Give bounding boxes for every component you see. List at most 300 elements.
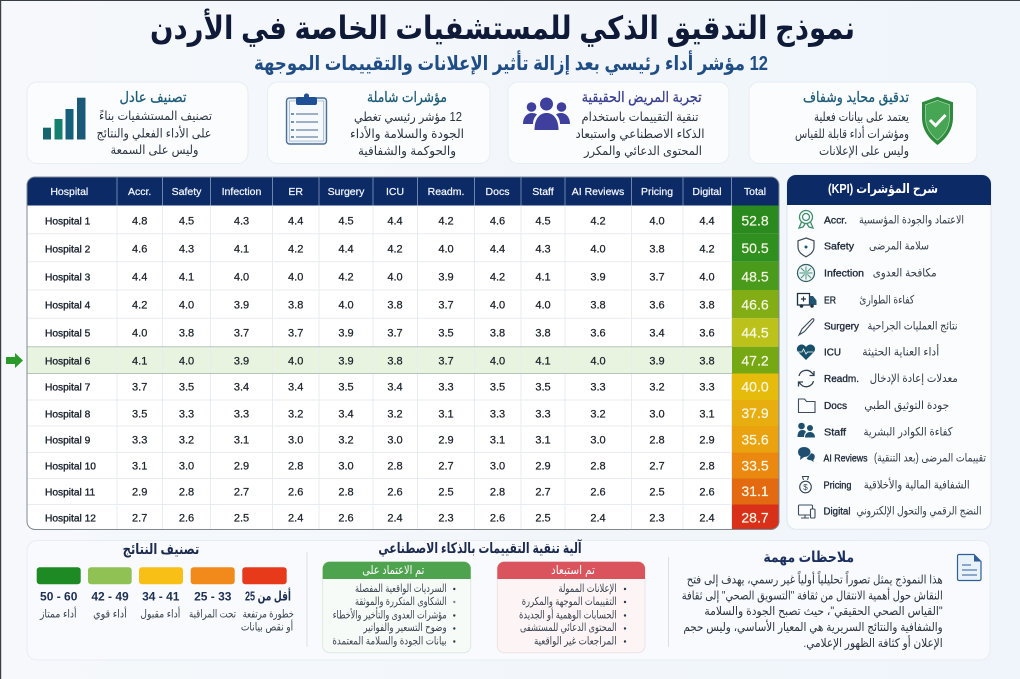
KPI: digital	[798, 505, 982, 518]
row: hospital 1: 4.3	[234, 216, 249, 228]
row: hospital 1: 4.2	[590, 216, 606, 228]
row: hospital 3: 4.1	[535, 272, 551, 284]
notes paragraph: والشفافية والنتائج السريرية هي المعيار الأساسي، وليس حجم	[683, 619, 943, 635]
table header: Digital	[692, 186, 722, 198]
class: acceptable: 34 - 41	[142, 590, 180, 604]
row: hospital 10: 2.7	[438, 461, 454, 473]
row: hospital 6: 3.7	[438, 356, 454, 368]
KPI: infection: مكافحة العدوى	[873, 268, 937, 280]
card text: تصنيف المستشفيات بناءً	[99, 109, 212, 123]
box: relied upon: وضوح التسعير والفواتير	[363, 622, 447, 634]
row: hospital 9: 3.0	[288, 435, 303, 447]
KPI: documentation	[798, 399, 949, 413]
row: hospital 7: 3.4	[288, 382, 303, 394]
row: hospital 9: 3.0	[387, 435, 403, 447]
box: excluded: الحسابات الوهمية أو الجديدة	[519, 608, 617, 622]
row: hospital 10: 3.0	[179, 461, 194, 473]
row: hospital 2: 4.4	[338, 243, 354, 255]
row: hospital 4: 3.6	[649, 300, 665, 312]
KPI: emergency: ER	[824, 294, 836, 306]
table header: Readm.	[428, 186, 464, 198]
KPI: safety: Safety	[824, 240, 855, 252]
row: hospital 3: Hospital 3	[45, 272, 91, 284]
row: hospital 8: 3.5	[132, 408, 147, 420]
KPI: infection: Infection	[824, 268, 864, 280]
class: excellent: أداء ممتاز	[39, 606, 77, 620]
row: hospital 2: 4.0	[438, 243, 454, 255]
KPI: pricing	[800, 476, 970, 493]
table header: Docs	[486, 186, 509, 198]
row: hospital 1	[45, 212, 769, 228]
icon: people	[523, 98, 570, 130]
KPI: documentation: جودة التوثيق الطبي	[864, 400, 949, 413]
row: hospital 12: 2.4	[288, 513, 303, 525]
icon: document	[958, 554, 981, 580]
row: hospital 4: 4.0	[535, 300, 551, 312]
row: hospital 9: 3.2	[179, 435, 194, 447]
notes paragraph: "القياس الصحي الحقيقي"، حيث تصبح الجودة والسلامة	[704, 604, 943, 619]
row: hospital 9: 35.6	[741, 432, 769, 448]
table header: Pricing	[641, 186, 673, 198]
row: hospital 7: 3.3	[590, 382, 606, 394]
row: hospital 7: 3.4	[234, 382, 249, 394]
row: hospital 2: 4.0	[590, 243, 606, 255]
panel: real patient experience card	[508, 82, 729, 164]
KPI: surgery	[799, 319, 958, 335]
row: hospital 3: 3.9	[438, 272, 454, 284]
notes paragraph: الإعلان أو كثافة الظهور الإعلامي.	[803, 635, 943, 651]
row: hospital 8: 37.9	[741, 405, 769, 421]
row: hospital 7: 3.5	[535, 382, 551, 394]
row: hospital 8	[45, 405, 769, 421]
row: hospital 2: Hospital 2	[45, 244, 91, 255]
row: hospital 4: 3.8	[387, 300, 403, 312]
row: hospital 5: 3.7	[387, 328, 403, 340]
class: excellent	[37, 567, 81, 620]
row: hospital 6	[45, 352, 769, 368]
KPI: AI reviews	[798, 447, 986, 466]
row: hospital 4	[45, 296, 769, 312]
row: hospital 12: 28.7	[741, 510, 769, 526]
row: hospital 12: 2.6	[490, 513, 505, 525]
box: relied upon: مؤشرات العدوى والتأخير والأخطاء	[333, 606, 447, 622]
panel: results classification	[37, 542, 294, 634]
class: strong	[88, 567, 132, 620]
row: hospital 7: 3.5	[490, 382, 505, 394]
row: hospital 6: 4.0	[490, 356, 505, 368]
row: hospital 9: 2.8	[649, 435, 665, 447]
row: hospital 11: 2.7	[234, 486, 249, 498]
panel: neutral transparent audit card	[749, 82, 977, 164]
row: hospital 3: 4.2	[490, 272, 505, 284]
row: hospital 3: 4.2	[338, 272, 354, 284]
class: strong: أداء قوي	[93, 606, 127, 620]
row: hospital 4: 4.0	[338, 300, 354, 312]
row: hospital 11: 2.8	[490, 486, 505, 498]
row: hospital 3	[45, 268, 769, 284]
row: hospital 9: 3.0	[590, 435, 606, 447]
panel: bottom strip background	[27, 540, 990, 660]
KPI: digital: Digital	[824, 506, 850, 518]
notes heading: ملاحظات مهمة	[763, 549, 854, 566]
card text: وليس على الإعلانات	[819, 144, 909, 159]
table header: ER	[288, 186, 303, 198]
row: hospital 10: 2.9	[234, 461, 249, 473]
row: hospital 6: 4.1	[535, 356, 551, 368]
row: hospital 11: 2.6	[699, 486, 715, 498]
row: hospital 10: Hospital 10	[45, 462, 96, 473]
row: hospital 2: 4.3	[179, 243, 194, 255]
class: strong: 42 - 49	[91, 590, 129, 604]
table header: Total	[744, 186, 766, 198]
row: hospital 1: 4.4	[699, 216, 715, 228]
icon: shield check	[922, 97, 953, 145]
row: hospital 10: 3.1	[132, 461, 147, 473]
table header: Surgery	[328, 186, 365, 198]
KPI: accreditation	[799, 210, 964, 228]
row: hospital 3: 4.1	[179, 272, 194, 284]
row: hospital 4: 3.7	[438, 300, 454, 312]
KPI: readmission: معدلات إعادة الإدخال	[870, 373, 958, 385]
row: hospital 10: 3.0	[338, 461, 354, 473]
table header: Safety	[172, 186, 202, 198]
row: hospital 6: 4.0	[288, 356, 303, 368]
row: hospital 12	[45, 510, 769, 526]
row: hospital 5: 3.8	[490, 328, 505, 340]
icon: clipboard	[286, 93, 326, 144]
KPI: readmission	[798, 370, 958, 387]
panel: important notes	[682, 549, 981, 651]
row: hospital 2: 4.2	[288, 243, 303, 255]
row: hospital 4: 3.8	[590, 300, 606, 312]
row: hospital 6: 3.9	[234, 356, 249, 368]
row: hospital 12: 2.7	[132, 513, 147, 525]
KPI: ICU: ICU	[824, 346, 841, 358]
row: hospital 9: 3.1	[490, 435, 505, 447]
row: hospital 5: 3.9	[338, 328, 354, 340]
KPI: staff: كفاءة الكوادر البشرية	[864, 426, 953, 440]
row: hospital 10: 33.5	[741, 458, 769, 474]
class: high risk: خطورة مرتفعة	[243, 608, 294, 620]
box: excluded: المحتوى الدعائي للمستشفى	[520, 622, 617, 634]
row: hospital 10: 3.0	[490, 461, 505, 473]
row: hospital 3: 4.0	[699, 272, 715, 284]
KPI: ICU: أداء العناية الحثيثة	[862, 344, 939, 358]
row: hospital 8: 3.2	[590, 408, 606, 420]
row: hospital 8: Hospital 8	[45, 409, 91, 420]
row: hospital 5: 3.7	[288, 328, 303, 340]
row: hospital 3: 48.5	[741, 268, 769, 284]
panel: fair ranking card	[27, 82, 248, 164]
total score colour column	[732, 206, 779, 530]
row: hospital 2: 4.2	[387, 243, 403, 255]
row: hospital 1: 4.8	[132, 216, 147, 228]
card text	[576, 110, 704, 159]
row: hospital 8: 3.3	[490, 408, 505, 420]
row: hospital 5: 3.4	[649, 328, 665, 340]
icon: bar chart	[43, 98, 86, 140]
box: excluded: المراجعات غير الواقعية	[534, 636, 617, 648]
card text	[96, 109, 212, 158]
KPI: staff	[798, 423, 953, 440]
row: hospital 10: 2.8	[288, 461, 303, 473]
row: hospital 9: 2.9	[438, 435, 454, 447]
row: hospital 3: 4.0	[288, 272, 303, 284]
row: hospital 11	[45, 483, 769, 499]
row: hospital 8: 3.2	[387, 408, 403, 420]
table header: AI Reviews	[572, 186, 624, 198]
row: hospital 9: 3.1	[234, 435, 249, 447]
row: hospital 7: 3.3	[438, 382, 454, 394]
row: hospital 11: Hospital 11	[45, 487, 96, 498]
row: hospital 9: 3.1	[535, 435, 551, 447]
box: relied upon: بيانات الجودة والسلامة المعتمدة	[332, 636, 447, 648]
row: hospital 12: 2.5	[234, 513, 249, 525]
row: hospital 1: 4.0	[649, 216, 665, 228]
row: hospital 1: 52.8	[741, 212, 769, 228]
row: hospital 9: 3.3	[132, 435, 147, 447]
row: hospital 3: 3.7	[649, 272, 665, 284]
box: excluded: التقييمات الموجهة والمكررة	[522, 596, 617, 608]
card text: والحوكمة والشفافية	[358, 144, 456, 159]
row: hospital 6: Hospital 6	[45, 356, 91, 368]
row: hospital 1: 4.2	[438, 216, 454, 228]
row: hospital 8: 3.3	[179, 408, 194, 420]
card text: المحتوى الدعائي والمكرر	[583, 144, 702, 159]
row: hospital 1: 4.6	[490, 216, 505, 228]
row: hospital 6: 3.9	[649, 356, 665, 368]
row: hospital 12: 2.6	[179, 513, 194, 525]
row: hospital 8: 3.4	[338, 408, 354, 420]
row: hospital 4: 4.0	[179, 300, 194, 312]
KPI: AI reviews: تقييمات المرضى (بعد التنقية)	[874, 452, 986, 466]
card text: 12 مؤشر رئيسي تغطي	[354, 110, 462, 125]
row: hospital 12: 2.3	[649, 513, 665, 525]
card text: تنقية التقييمات باستخدام	[582, 110, 699, 124]
row: hospital 2: 3.8	[649, 243, 665, 255]
row: hospital 4: 4.0	[490, 300, 505, 312]
title: نموذج التدقيق الذكي للمستشفيات الخاصة في الأردن	[150, 8, 855, 47]
classification heading: تصنيف النتائج	[123, 542, 199, 558]
row: hospital 8: 3.0	[649, 408, 665, 420]
row: hospital 7: Hospital 7	[45, 383, 91, 394]
notes paragraph	[682, 571, 943, 651]
row: hospital 1: Hospital 1	[45, 217, 91, 228]
row: hospital 4: 3.8	[699, 300, 715, 312]
row: hospital 5: 3.6	[590, 328, 606, 340]
row: hospital 7: 3.5	[338, 382, 354, 394]
row: hospital 1: 4.4	[288, 216, 303, 228]
row: hospital 11: 2.6	[288, 486, 303, 498]
row: hospital 12: 2.3	[438, 513, 454, 525]
row: hospital 6: 4.0	[179, 356, 194, 368]
row: hospital 9: Hospital 9	[45, 436, 91, 447]
row: hospital 11: 2.8	[179, 486, 194, 498]
KPI: emergency: كفاءة الطوارئ	[859, 294, 915, 308]
row: hospital 8: 3.3	[535, 408, 551, 420]
row: hospital 11: 2.5	[649, 486, 665, 498]
class: under watch: تحت المراقبة	[189, 608, 236, 620]
row: hospital 6: 47.2	[741, 352, 769, 368]
card heading: تجربة المريض الحقيقية	[582, 90, 702, 106]
KPI: pricing: Pricing	[824, 480, 852, 492]
row: hospital 5: 4.0	[132, 328, 147, 340]
row: hospital 3: 4.4	[132, 272, 147, 284]
row: hospital 5: 3.8	[535, 328, 551, 340]
row: hospital 12: 2.6	[338, 513, 354, 525]
row: hospital 7: 3.4	[387, 382, 403, 394]
KPI: infection	[798, 264, 937, 282]
mechanism heading: آلية تنقية التقييمات بالذكاء الاصطناعي	[378, 539, 582, 557]
KPI legend header	[787, 175, 991, 205]
KPI: pricing: $	[803, 483, 808, 492]
row: hospital 6: 3.8	[387, 356, 403, 368]
row: hospital 2: 4.4	[490, 243, 505, 255]
table row highlight: hospital 6	[28, 347, 732, 374]
table header: Accr.	[128, 186, 151, 198]
card heading: تصنيف عادل	[120, 90, 186, 106]
row: hospital 3: 3.9	[590, 272, 606, 284]
row: hospital 11: 2.8	[338, 486, 354, 498]
KPI: readmission: Readm.	[824, 373, 859, 385]
row: hospital 10	[45, 458, 769, 474]
card text: الجودة والسلامة والأداء	[350, 126, 464, 142]
row: hospital 5: 3.5	[438, 328, 454, 340]
KPI: pricing: الشفافية المالية والأخلاقية	[864, 478, 970, 492]
notes paragraph: هذا النموذج يمثل تصوراً تحليلياً أولياً غير رسمي، يهدف إلى فتح	[687, 571, 943, 588]
row: hospital 10: 2.7	[649, 461, 665, 473]
card text: ومؤشرات أداء قابلة للقياس	[795, 125, 909, 142]
row: hospital 4: 3.8	[288, 300, 303, 312]
table header	[27, 177, 779, 206]
row: hospital 5: 3.6	[699, 328, 715, 340]
card text	[350, 110, 464, 159]
card text: يعتمد على بيانات فعلية	[814, 110, 909, 124]
KPI: digital: النضج الرقمي والتحول الإلكتروني	[856, 506, 982, 518]
row: hospital 1: 4.4	[387, 216, 403, 228]
row: hospital 3: 4.0	[234, 272, 249, 284]
class: under watch	[189, 567, 236, 620]
row: hospital 5: 3.7	[234, 328, 249, 340]
card text	[795, 110, 909, 159]
row: hospital 11: 2.5	[438, 486, 454, 498]
row: hospital 11: 2.6	[590, 486, 606, 498]
row: hospital 9	[45, 432, 769, 448]
panel: comprehensive indicators card	[268, 82, 490, 164]
panel: hospital scores table	[27, 177, 779, 530]
row: hospital 7: 3.5	[179, 382, 194, 394]
row: hospital 7: 3.3	[699, 382, 715, 394]
box: relied upon	[323, 562, 471, 653]
row: hospital 2	[45, 240, 769, 256]
row: hospital 12: 2.5	[535, 513, 551, 525]
KPI: accreditation: Accr.	[824, 214, 847, 226]
class: high risk: أقل من 25	[245, 588, 291, 604]
card text: الذكاء الاصطناعي واستبعاد	[576, 127, 704, 142]
card text: على الأداء الفعلي والنتائج	[96, 126, 212, 142]
KPI: staff: Staff	[824, 426, 846, 438]
class: excellent: 50 - 60	[40, 590, 78, 604]
subtitle: 12 مؤشر أداء رئيسي بعد إزالة تأثير الإعلانات والتقييمات الموجهة	[254, 49, 768, 76]
row: hospital 8: 3.3	[234, 408, 249, 420]
card heading: مؤشرات شاملة	[367, 90, 447, 106]
row: hospital 8: 3.2	[288, 408, 303, 420]
row: hospital 9: 2.9	[699, 435, 715, 447]
row: hospital 4: 3.9	[234, 300, 249, 312]
KPI: safety	[798, 238, 929, 257]
row: hospital 12: 2.4	[387, 513, 403, 525]
class: under watch: 25 - 33	[194, 590, 232, 604]
row: hospital 6: 4.0	[590, 356, 606, 368]
row: hospital 1: 4.5	[338, 216, 354, 228]
row: hospital 10: 2.8	[699, 461, 715, 473]
row: hospital 2: 50.5	[741, 240, 769, 256]
row: hospital 2: 4.6	[132, 243, 147, 255]
KPI: safety: سلامة المرضى	[869, 240, 929, 254]
row: hospital 10: 2.8	[590, 461, 606, 473]
notes paragraph: النقاش حول أهمية الانتقال من ثقافة "التسويق الصحي" إلى ثقافة	[682, 588, 943, 604]
row: hospital 12: 2.4	[590, 513, 606, 525]
row: hospital 12: 2.4	[699, 513, 715, 525]
row: hospital 8: 3.1	[438, 408, 454, 420]
panel: KPI legend	[787, 175, 991, 529]
arrow: highlights hospital 6	[6, 353, 23, 368]
row: hospital 4: 46.6	[741, 296, 769, 312]
row: hospital 2: 4.1	[234, 243, 249, 255]
box: excluded	[497, 562, 645, 653]
KPI: surgery: نتائج العمليات الجراحية	[868, 320, 958, 334]
row: hospital 9: 3.2	[338, 435, 354, 447]
box: excluded: تم استبعاد	[551, 563, 595, 577]
row: hospital 4: 4.2	[132, 300, 147, 312]
panel: AI review filtering mechanism	[323, 539, 645, 653]
card heading: تدقيق محايد وشفاف	[803, 90, 909, 106]
class: high risk: أو نقص بيانات	[241, 620, 293, 634]
class: acceptable	[139, 567, 183, 620]
row: hospital 1: 4.5	[179, 216, 194, 228]
box: relied upon: تم الاعتماد على	[362, 563, 424, 577]
row: hospital 4: Hospital 4	[45, 300, 91, 312]
row: hospital 10: 2.9	[535, 461, 551, 473]
table header: ICU	[386, 186, 404, 198]
row: hospital 2: 4.2	[699, 243, 715, 255]
table header: Hospital	[50, 186, 88, 198]
row: hospital 5: 44.5	[741, 324, 769, 340]
KPI: AI reviews: AI Reviews	[824, 452, 868, 464]
KPI: surgery: Surgery	[824, 320, 860, 332]
row: hospital 8: 3.1	[699, 408, 715, 420]
box: relied upon: السرديات الواقعية المفصلة	[355, 583, 447, 595]
row: hospital 7: 3.7	[132, 382, 147, 394]
KPI legend header: شرح المؤشرات (KPI)	[828, 181, 938, 196]
row: hospital 2: 4.3	[535, 243, 551, 255]
KPI: emergency	[798, 294, 915, 308]
box: excluded: الإعلانات الممولة	[558, 583, 617, 595]
row: hospital 12: Hospital 12	[45, 514, 96, 525]
row: hospital 5: Hospital 5	[45, 328, 91, 340]
box: relied upon: الشكاوى المتكررة والموثقة	[355, 596, 447, 608]
class: acceptable: أداء مقبول	[140, 606, 180, 620]
KPI: ICU	[797, 344, 939, 360]
row: hospital 6: 3.8	[699, 356, 715, 368]
row: hospital 11: 2.6	[387, 486, 403, 498]
row: hospital 7: 3.2	[649, 382, 665, 394]
row: hospital 7: 40.0	[741, 378, 769, 394]
KPI: accreditation: الاعتماد والجودة المؤسسية	[859, 214, 964, 228]
row: hospital 6: 4.1	[132, 356, 147, 368]
row: hospital 5	[45, 324, 769, 340]
row: hospital 5: 3.8	[179, 328, 194, 340]
